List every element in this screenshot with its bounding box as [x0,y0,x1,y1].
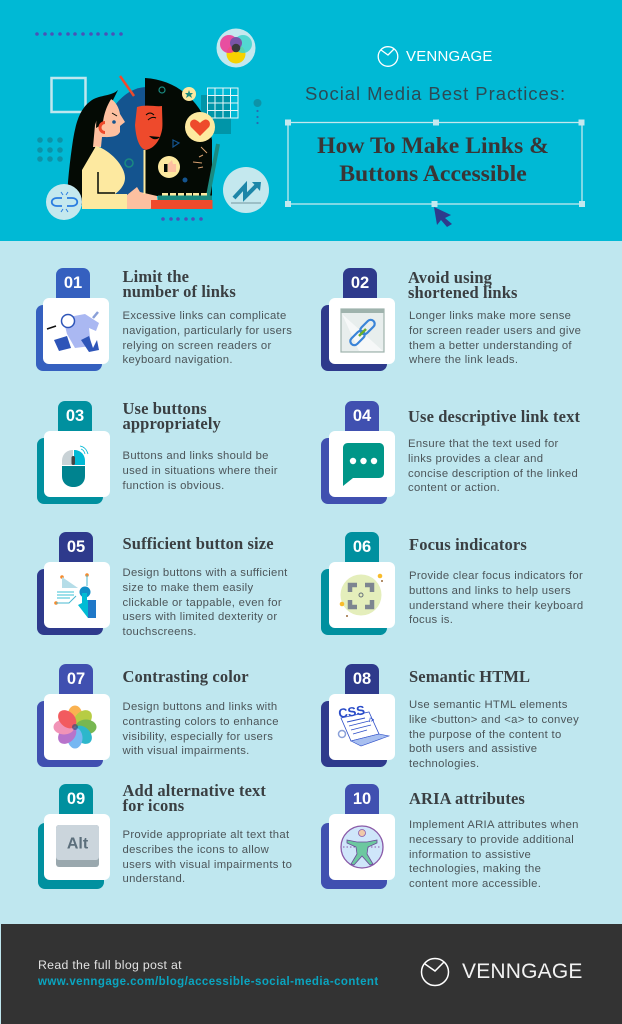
text 08: technologies. [409,758,479,770]
icon: CSS laptop [329,694,395,760]
number badge: 04 [353,407,371,425]
heading 04: Use descriptive link text [408,406,580,426]
heading 01: Limit the [122,266,189,286]
logo: venngage header [378,46,493,67]
icon: alt key [44,814,110,880]
text 03: used in situations where their [122,465,278,477]
icon: star [182,87,196,101]
eye [112,120,116,124]
text 04: concise description of the linked [408,468,578,480]
subtitle: Social Media Best Practices: [305,83,566,104]
text 03: Buttons and links should be [122,450,269,462]
text 06: buttons and links to help users [409,585,571,597]
item 01 [36,268,109,371]
text 02: them a better understanding of [409,340,572,352]
header illustration [35,28,269,221]
number badge [59,532,93,568]
red stroke [120,76,134,96]
text 10: content more accessible. [409,878,541,890]
number badge [58,401,92,437]
heading 03 [122,398,221,432]
card shadow [37,569,103,635]
item 08 [321,664,395,767]
heading 02 [408,268,518,302]
card shadow [321,701,387,767]
laptop screen [208,144,218,196]
text 01: relying on screen readers or [122,340,272,352]
heading 01 [122,266,236,300]
heading 08: Semantic HTML [409,666,530,686]
text 07: contrasting colors to enhance [122,716,279,728]
small shapes [125,87,165,167]
card shadow [38,823,104,889]
text 09: users with visual impairments to [122,859,292,871]
card shadow [37,701,103,767]
number badge [343,268,377,304]
icon: growth arrows [223,167,269,213]
text 01: Excessive links can complicate [122,310,287,322]
heading 03: Use buttons [122,398,207,418]
icon: chat bubble [329,431,395,497]
header band [0,0,622,241]
face and neck [93,99,125,147]
icon: browser link [329,298,395,364]
heading 10: ARIA attributes [409,788,525,808]
icon: touch hand [44,562,110,628]
text 04 [408,438,578,494]
logo wordmark: VENNGAGE [406,48,493,65]
text 06 [409,570,583,626]
item 10 [321,784,395,889]
laptop keys [162,193,207,196]
text 04: links provides a clear and [408,453,543,465]
cursor arrow [434,207,452,227]
grid [208,88,238,118]
dome: blue half [101,87,146,196]
icon: CSS laptop: /> [369,718,375,724]
text 05: Design buttons with a sufficient [122,567,288,579]
hair [67,90,118,205]
number badge [345,401,379,437]
selection box [285,120,585,227]
mask stick [144,150,146,194]
footer text: www.venngage.com/blog/accessible-social-media-content [38,976,379,988]
mask [135,106,162,150]
teal dots right [254,99,262,124]
heading 07: Contrasting color [122,666,249,686]
heading 01: number of links [122,282,236,300]
icon: mouse [44,431,110,497]
text 03: function is obvious. [122,480,225,492]
icon: accessibility figure [329,814,395,880]
text 03 [122,450,278,492]
item 05 [37,532,110,635]
text 04: content or action. [408,482,500,494]
body [82,146,127,209]
text 01: navigation, particularly for users [122,325,292,337]
heading 06: Focus indicators [409,534,527,554]
icon: thumbs up [158,156,180,178]
card shadow [36,305,102,371]
item 04 [321,401,395,504]
number badge: 03 [66,407,84,425]
text 07 [122,701,279,757]
text 05 [122,567,288,638]
number badge: 07 [67,670,85,688]
text 05: size to make them easily [122,582,253,594]
icon: broken link [46,184,82,220]
text 08: both users and assistive [409,743,537,755]
text 06: understand where their keyboard [409,600,583,612]
text 02: where the link leads. [409,354,518,366]
number badge: 09 [67,790,85,808]
number badge [345,532,379,568]
card shadow [321,569,387,635]
heading 09: Add alternative text [122,780,266,800]
text 07: with visual impairments. [122,745,250,757]
footer text [38,958,379,988]
item 07 [37,664,110,767]
text 09: describes the icons to allow [122,844,269,856]
text 09: Provide appropriate alt text that [122,829,289,841]
card shadow [321,305,387,371]
teal dot grid [37,137,63,162]
text 05: users with limited dexterity or [122,611,277,623]
number badge: 06 [353,538,371,556]
main title: Buttons Accessible [339,161,527,187]
text 07: visibility, especially for users [122,731,273,743]
top dotted row [35,32,123,36]
card shadow [321,438,387,504]
text 07: Design buttons and links with [122,701,278,713]
item 09 [38,784,110,889]
icon: CSS laptop: CSS [337,702,366,721]
logo mark [378,46,398,67]
heading 09 [122,780,266,814]
footer [1,924,622,1024]
heading 09: for icons [122,796,184,814]
main title: How To Make Links & [317,133,549,159]
text 09: understand. [122,873,185,885]
number badge: 02 [351,274,369,292]
footer text: Read the full blog post at [38,958,182,972]
text 10: Implement ARIA attributes when [409,819,579,831]
card shadow [37,438,103,504]
icon: alt key: Alt [67,836,89,852]
item 06 [321,532,395,635]
number badge: 10 [353,790,371,808]
icon: colour venn circle [216,28,256,68]
handles [285,120,585,207]
earring [98,121,105,134]
hand [127,187,158,209]
text 10 [409,819,579,890]
heading 05: Sufficient button size [122,534,274,552]
laptop base [158,196,212,200]
hair front [96,98,112,128]
text 10: information to assistive [409,849,531,861]
heading 02: shortened links [408,282,518,302]
icon: colour flower [44,694,110,760]
number badge [56,268,90,304]
number badge: 05 [67,538,85,556]
text 08: like <button> and <a> to convey [409,714,579,726]
text 01: keyboard navigation. [122,354,233,366]
number badge [345,784,379,820]
text 06: focus is. [409,614,453,626]
text 10: necessary to provide additional [409,834,574,846]
footer logo wordmark: VENNGAGE [462,960,583,983]
text 02 [409,310,581,366]
teal square behind grid [201,95,231,134]
bottom dotted row [161,217,203,221]
card shadow [321,823,387,889]
text 04: Ensure that the text used for [408,438,559,450]
text 08: Use semantic HTML elements [409,699,568,711]
heading 02: Avoid using [408,268,492,286]
text 01 [122,310,292,366]
text 08: the purpose of the content to [409,729,562,741]
outlined square [52,78,86,112]
text 05: touchscreens. [122,626,197,638]
text 08 [409,699,579,770]
number badge [59,664,93,700]
text 02: Longer links make more sense [409,310,571,322]
text 10: technologies, making the [409,863,541,875]
number badge: 08 [353,670,371,688]
main title [317,133,549,187]
dome: black half [145,78,212,196]
icon: focus target [329,562,395,628]
text 05: clickable or tappable, even for [122,597,282,609]
icon: links illustration [43,298,109,364]
text 06: Provide clear focus indicators for [409,570,583,582]
footer logo mark [420,958,450,986]
number badge: 01 [64,274,82,292]
text 09 [122,829,292,885]
icon: heart [185,112,215,142]
item 03 [37,401,110,504]
number badge [345,664,379,700]
item 02 [321,268,395,371]
text 02: for screen reader users and give [409,325,581,337]
heading 03: appropriately [122,414,221,432]
arm line [98,172,115,193]
number badge [59,784,93,820]
